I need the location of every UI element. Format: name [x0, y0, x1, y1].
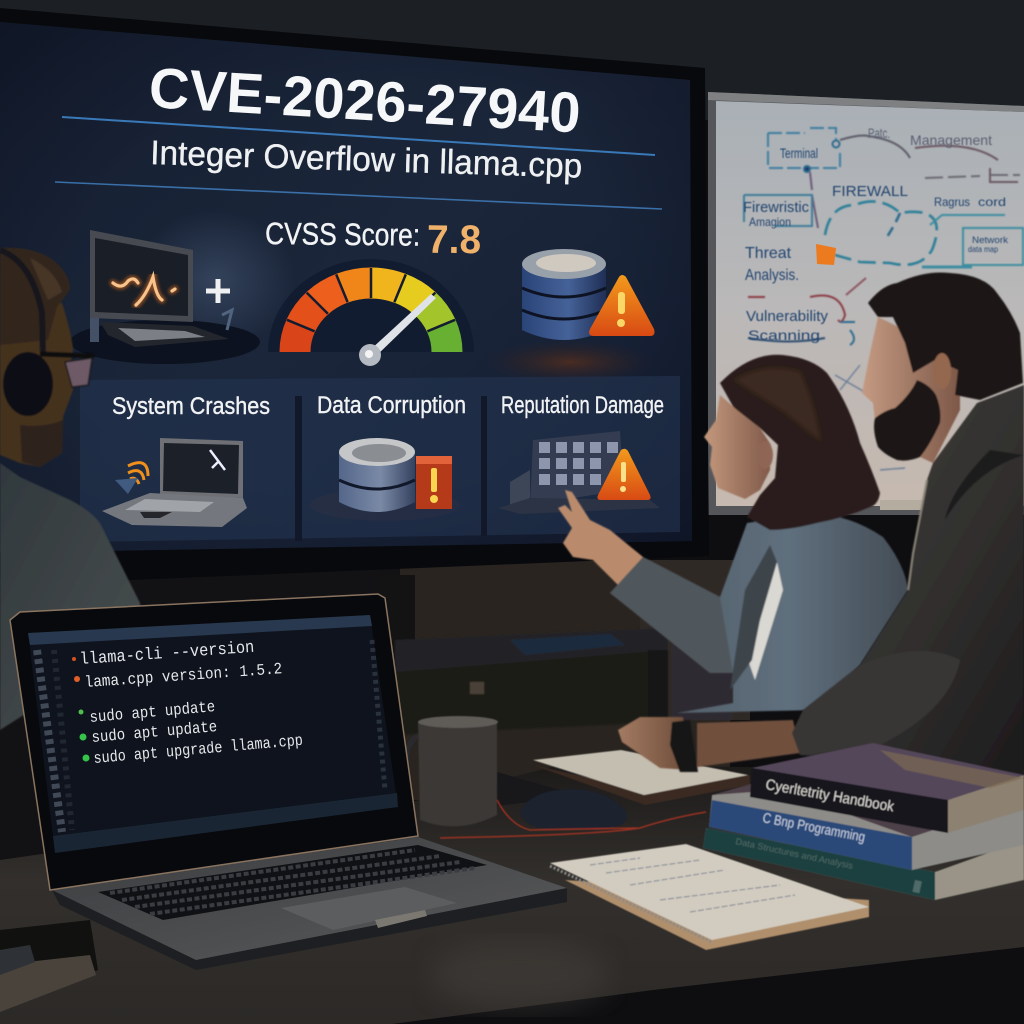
icon: broken laptop — [102, 438, 247, 527]
cvss score label — [265, 216, 481, 262]
divider line — [62, 117, 655, 155]
desk — [0, 765, 1024, 1024]
whiteboard handwriting: Scanning — [748, 327, 820, 343]
phone on desk — [497, 772, 560, 806]
panel: reputation damage: Reputation Damage — [501, 392, 664, 419]
person: man in dark hoodie — [618, 272, 1024, 775]
sleeve cuff — [792, 651, 960, 755]
terminal screen — [28, 615, 398, 853]
hoodie zipper — [908, 480, 927, 590]
ear — [933, 353, 951, 389]
monitor stand — [380, 575, 415, 665]
gauge chart — [268, 259, 474, 366]
terminal commands: sudo apt update — [89, 698, 216, 727]
face — [704, 395, 771, 499]
dark lapel — [730, 545, 777, 690]
neck and face — [0, 290, 73, 467]
hair — [720, 355, 880, 530]
whiteboard handwriting: Terminal — [780, 145, 818, 161]
foreground laptop — [10, 594, 567, 970]
icon: database with red alert — [310, 438, 460, 521]
whiteboard handwriting: cord — [978, 195, 1006, 209]
whiteboard handwriting: Analysis. — [745, 267, 799, 284]
whiteboard handwriting: Network — [972, 235, 1009, 245]
book: bottom — [703, 828, 1024, 900]
whiteboard handwriting: Ragrus — [934, 195, 970, 209]
whiteboard handwriting: data map — [968, 245, 998, 254]
glasses — [40, 354, 94, 387]
whiteboard handwriting: Amagion — [749, 215, 791, 229]
panel: system crashes: System Crashes — [112, 393, 270, 420]
watch — [670, 720, 698, 772]
hair — [0, 248, 70, 345]
laptop base and keyboard — [52, 837, 567, 970]
paper stack on desk — [533, 750, 750, 805]
panel: reputation damage — [498, 392, 664, 514]
white shirt — [748, 562, 783, 680]
pointing hand — [558, 490, 643, 587]
terminal commands: sudo apt update — [91, 718, 218, 747]
whiteboard handwriting: Threat — [745, 245, 792, 262]
whiteboard handwriting: Firewristic — [743, 199, 809, 216]
shelf and clutter below monitor — [395, 628, 732, 735]
whiteboard handwriting: FIREWALL — [832, 183, 908, 200]
terminal commands: sudo apt upgrade llama.cpp — [93, 732, 304, 768]
computer mouse — [440, 789, 706, 838]
headphones — [0, 250, 43, 355]
cvss score label: CVSS Score: — [265, 216, 420, 253]
laptop lid — [10, 594, 418, 890]
hand — [618, 717, 690, 770]
screen background — [0, 22, 692, 552]
title: CVE-2026-27940 — [147, 56, 582, 146]
body — [0, 463, 142, 730]
panel: data corruption — [310, 392, 466, 521]
terminal commands: lama.cpp version: 1.5.2 — [84, 660, 283, 692]
wall monitor — [0, 8, 709, 665]
whiteboard handwriting: Vulnerability — [746, 308, 829, 325]
divider line — [55, 182, 662, 209]
hair — [868, 272, 1023, 400]
panel: data corruption: Data Corruption — [317, 392, 466, 419]
hoodie — [792, 385, 1024, 775]
spiral notebook — [550, 844, 869, 950]
book: C programming — [709, 770, 1024, 870]
whiteboard diagram lines — [744, 128, 1023, 470]
icon: laptop with glowing glitch — [70, 230, 260, 364]
stack of books — [703, 743, 1024, 900]
whiteboard handwriting: Patc. — [868, 125, 890, 141]
forearm — [697, 720, 800, 767]
whiteboard handwriting: Management — [910, 132, 992, 148]
icon: building with warning — [498, 431, 660, 514]
person: woman pointing at screen — [558, 355, 908, 713]
cvss score label: 7.8 — [427, 218, 481, 262]
whiteboard handwriting — [743, 125, 1009, 343]
face — [862, 317, 960, 463]
terminal commands — [72, 639, 304, 768]
beard — [874, 380, 940, 461]
person: man with headphones at left — [0, 248, 142, 730]
jacket body — [610, 514, 908, 713]
panel: system crashes — [102, 393, 270, 527]
subtitle: Integer Overflow in llama.cpp — [150, 134, 583, 186]
icon: database with warning — [485, 249, 655, 384]
whiteboard — [708, 92, 1024, 515]
book: cybersecurity handbook — [750, 743, 1024, 833]
book: cybersecurity handbook: Cyerltetrity Handbook — [764, 776, 896, 816]
terminal commands: llama-cli --version — [79, 639, 255, 670]
panel: lower consequences row — [80, 376, 680, 542]
coffee mug — [406, 716, 498, 826]
monitor bezel — [0, 8, 709, 580]
icon: orange sticky note — [816, 244, 836, 265]
book: C programming: C Bnp Programming — [761, 809, 867, 845]
book: bottom: Data Structures and Analysis — [735, 836, 855, 871]
